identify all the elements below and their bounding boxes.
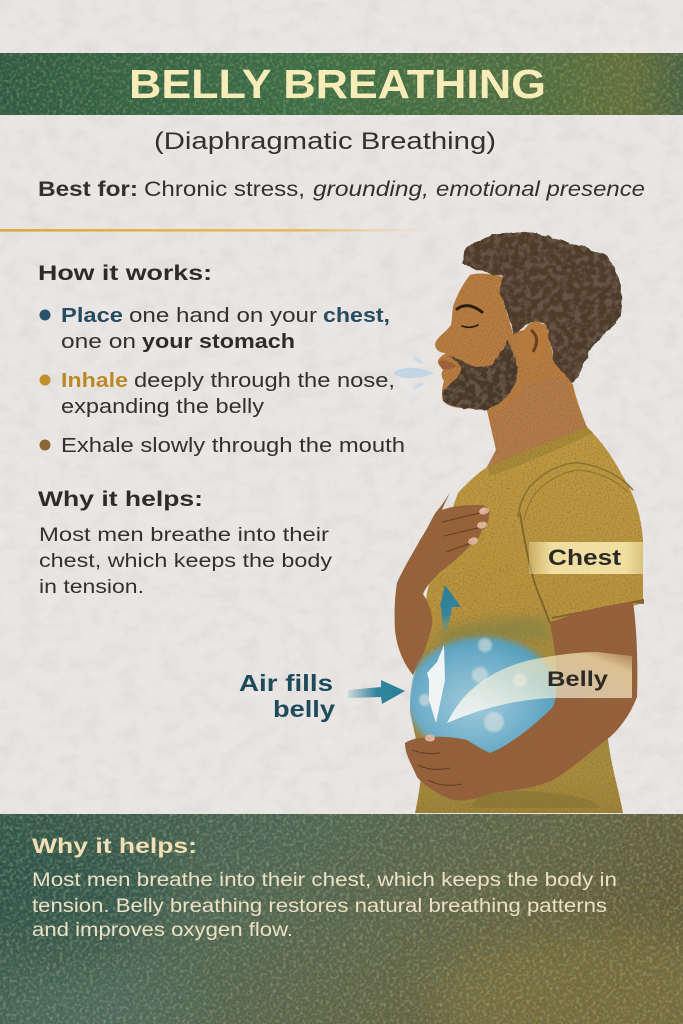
neck and face: [435, 274, 587, 467]
subtitle: (Diaphragmatic Breathing): [154, 128, 496, 155]
mouth: [438, 361, 457, 370]
shirt: [410, 427, 643, 813]
step 1: one hand on your: [129, 305, 317, 327]
step 2: expanding the belly: [61, 396, 264, 418]
why it helps text: chest, which keeps the body: [39, 550, 332, 572]
beard: [443, 340, 518, 410]
step 3: Exhale slowly through the mouth: [61, 435, 405, 457]
shirt fold shadow: [440, 617, 552, 645]
why it helps text: [39, 524, 332, 598]
label: chest: Chest: [548, 545, 622, 570]
step 1: Place: [61, 305, 123, 327]
best for line: Best for:: [38, 178, 138, 201]
ear: [515, 318, 551, 366]
label: air fills belly: Air fills: [239, 670, 333, 696]
eye and brow: [457, 306, 482, 327]
hair: [463, 232, 622, 383]
arrow: air into belly: [348, 680, 405, 704]
footer text: Most men breathe into their chest, which keeps the body in: [32, 870, 617, 891]
footer text: and improves oxygen flow.: [32, 920, 293, 941]
arrow: white up: [427, 645, 445, 723]
step 2: Inhale: [61, 370, 128, 392]
why it helps text: Most men breathe into their: [39, 524, 330, 546]
best for line: emotional presence: [436, 178, 645, 201]
step 1: one on: [61, 331, 136, 353]
best for line: Chronic stress,: [144, 178, 305, 201]
arrow: belly swoosh: [447, 652, 632, 723]
step 2: [40, 370, 395, 418]
heading: how it works: How it works:: [38, 262, 212, 285]
step 1: your stomach: [142, 331, 295, 353]
label: chest: [529, 542, 643, 574]
step 1: [40, 305, 390, 353]
footer heading: Why it helps:: [32, 835, 197, 858]
right arm and hand on belly: [405, 602, 637, 801]
step 1: chest,: [323, 305, 390, 327]
best for line: grounding,: [313, 178, 429, 201]
best for line: [38, 178, 645, 201]
footer text: [32, 870, 617, 941]
footer text: tension. Belly breathing restores natural breathing patterns: [32, 896, 607, 917]
title banner: BELLY BREATHING: [129, 61, 546, 107]
blue belly air: [407, 637, 559, 757]
heading: why it helps: Why it helps:: [38, 488, 203, 511]
label: air fills belly: belly: [273, 696, 335, 722]
title banner: [0, 53, 683, 115]
label: belly: Belly: [547, 668, 608, 691]
left arm and hand on chest: [395, 493, 490, 675]
footer panel: [0, 814, 683, 1024]
step 2: deeply through the nose,: [134, 370, 395, 392]
illustration: man: [393, 232, 643, 813]
label: air fills belly: [239, 670, 335, 722]
arrow: teal up: [440, 585, 461, 634]
gold divider: [0, 229, 440, 232]
why it helps text: in tension.: [39, 576, 144, 598]
icon: breath puff: [393, 355, 434, 390]
